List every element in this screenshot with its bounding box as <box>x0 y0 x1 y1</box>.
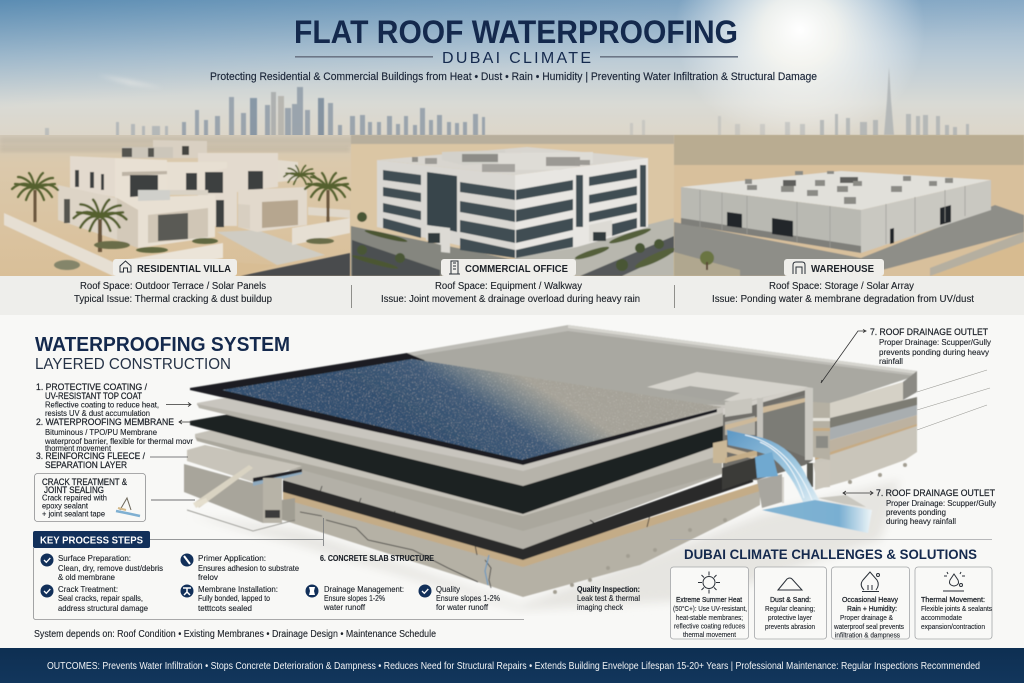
card: dust and sand: Dust & Sand: <box>770 595 811 604</box>
text: office details: Issue: Joint movement & drainage overload during heavy rain <box>381 294 640 305</box>
step: surface preparation: Clean, dry, remove dust/debris <box>58 564 163 573</box>
text: warehouse details: Roof Space: Storage / Solar Array <box>769 281 914 292</box>
callout: crack treatment: + joint sealant tape <box>42 510 106 518</box>
arrow: fleece to layer <box>150 456 188 458</box>
arrow: top drainage label <box>821 330 866 383</box>
text: villa details: Typical Issue: Thermal cracking & dust buildup <box>74 294 272 305</box>
layer: top coat sheet <box>190 353 722 465</box>
panel: commercial office illustration <box>351 135 677 276</box>
rubble along base <box>553 463 907 594</box>
step: drainage management: Drainage Management: <box>324 585 404 594</box>
card: dust and sand: prevents abrasion <box>765 622 815 631</box>
arrow: coating to layer <box>166 402 191 406</box>
layer: light protective base <box>197 395 725 486</box>
villa garage block <box>238 187 307 232</box>
rooftop plant <box>412 150 593 172</box>
label tab: residential villa <box>113 259 237 276</box>
pavement and roads <box>351 226 515 276</box>
step: membrane installation <box>180 584 278 613</box>
arrow: membrane to layer <box>179 420 192 424</box>
step: crack treatment <box>40 584 149 613</box>
palm behind <box>284 166 316 184</box>
step: crack treatment: address structural damage <box>58 604 149 613</box>
label tab: residential villa: RESIDENTIAL VILLA <box>137 264 231 275</box>
icon: sun <box>698 572 720 594</box>
label tab: warehouse <box>784 259 884 276</box>
icon: house with drops <box>861 572 880 592</box>
card: extreme heat: (50°C+): Use UV-resistant, <box>673 604 747 613</box>
arrow: bottom drainage label <box>843 491 873 495</box>
text: villa details <box>74 281 272 305</box>
step: drainage management: water runoff <box>323 603 366 612</box>
card: thermal movement: Flexible joints & sealants <box>921 604 992 613</box>
label: drainage outlet bottom <box>876 488 996 526</box>
text: quality inspection: imaging check <box>577 603 624 612</box>
leader lines from strata <box>917 370 990 430</box>
label: drainage outlet top: rainfall <box>879 357 903 366</box>
cracks <box>300 486 650 588</box>
card: dust and sand <box>754 567 826 639</box>
planting <box>364 228 408 244</box>
card: rain and humidity: waterproof seal prevents <box>833 622 904 631</box>
card: dust and sand: Regular cleaning; <box>765 604 815 613</box>
metal frame at drain <box>713 387 830 508</box>
building volumes <box>378 147 648 175</box>
title: FLAT ROOF WATERPROOFING <box>294 14 738 50</box>
label: drainage outlet top: prevents ponding during heavy <box>879 348 989 357</box>
layer list: resists UV & dust accumulation <box>45 409 150 418</box>
card: extreme heat: reflective coating reduces <box>674 622 745 630</box>
icon: house <box>120 261 131 272</box>
layer: reinforcing fleece <box>195 428 722 531</box>
text: villa details: Roof Space: Outdoor Terrace / Solar Panels <box>80 281 266 292</box>
key process steps tab: KEY PROCESS STEPS <box>40 536 143 546</box>
back roof slab <box>407 325 917 420</box>
label tab: warehouse: WAREHOUSE <box>811 264 874 275</box>
subtitle rule right <box>600 56 738 58</box>
icon: office tower <box>449 261 460 274</box>
villa upper volumes <box>153 140 207 158</box>
icon: sand pile <box>778 578 802 590</box>
heading: climate challenges: DUBAI CLIMATE CHALLENGES & SOLUTIONS <box>684 546 977 562</box>
heading: waterproofing system: LAYERED CONSTRUCTION <box>35 356 231 373</box>
footer bar <box>0 648 1024 683</box>
label: drainage outlet top: Proper Drainage: Scupper/Gully <box>879 338 991 347</box>
card: extreme heat <box>670 567 748 639</box>
callout: crack treatment: Crack repaired with <box>42 494 107 502</box>
villa lower left <box>58 185 117 240</box>
rule above climate section <box>670 538 992 541</box>
card: thermal movement <box>915 567 992 639</box>
card: extreme heat: heat-stable membranes; <box>676 613 743 622</box>
palms and planting <box>12 173 351 270</box>
concrete slab layer <box>283 452 722 549</box>
step: primer application: frelov <box>198 573 218 582</box>
subtitle rule left <box>295 56 433 58</box>
panel: key process steps box <box>34 548 524 620</box>
card: thermal movement: Thermal Movement: <box>921 595 985 604</box>
layer list: SEPARATION LAYER <box>45 460 127 470</box>
layer list: Reflective coating to reduce heat, <box>45 400 159 410</box>
label: drainage outlet top <box>870 327 991 366</box>
icon: droplet with rays <box>943 572 965 591</box>
text: office details <box>381 281 640 305</box>
card: dust and sand: protective layer <box>768 613 812 622</box>
step: primer application <box>180 554 300 582</box>
ground shadow <box>190 480 900 610</box>
callout: crack treatment: CRACK TREATMENT & <box>42 477 127 487</box>
panel: sky and skyline header <box>0 0 1024 145</box>
icon: warehouse door <box>793 262 805 274</box>
skyline: Burj Khalifa district <box>630 67 969 136</box>
text: office details: Roof Space: Equipment / Walkway <box>435 281 582 292</box>
panel: building info strip <box>0 276 1024 315</box>
panel: residential villa illustration <box>4 140 351 276</box>
step: membrane installation: Membrane Installation: <box>198 585 278 594</box>
label tab: commercial office <box>441 259 576 276</box>
illustration: layered roof cross-section <box>184 325 917 610</box>
card: thermal movement: expansion/contraction <box>921 622 985 631</box>
step: drainage management: Ensure slopes 1-2% <box>324 594 385 603</box>
text: warehouse details: Issue: Ponding water & membrane degradation from UV/dust <box>712 294 974 305</box>
key process steps tab <box>33 531 150 548</box>
villa front block <box>117 195 215 248</box>
card: rain and humidity: Occasional Heavy <box>842 595 898 604</box>
beige bedding stripe <box>283 483 760 567</box>
text: system dependency line: System depends on: Roof Condition • Existing Membranes • Drainage Design • Maintenance Schedule <box>34 629 436 640</box>
step: primer application: Primer Application: <box>198 554 266 563</box>
card: thermal movement: accommodate <box>921 613 962 622</box>
step: surface preparation: Surface Preparation: <box>58 554 131 563</box>
heading: waterproofing system: WATERPROOFING SYSTEM <box>35 334 290 356</box>
villa windows upper <box>75 170 263 197</box>
label: drainage outlet bottom: Proper Drainage: Scupper/Gully <box>886 499 996 508</box>
step: surface preparation <box>40 554 163 582</box>
heading: waterproofing system <box>35 334 290 373</box>
skyline: Dubai Marina <box>45 87 485 136</box>
road and driveway <box>240 253 350 276</box>
layer: black waterproofing membrane <box>190 414 725 514</box>
card: rain and humidity: Rain + Humidity: <box>847 604 897 613</box>
text: quality inspection: Leak test & thermal <box>577 594 640 603</box>
right side strata <box>815 371 917 490</box>
callout: crack treatment <box>34 474 146 522</box>
callout: crack treatment: JOINT SEALING <box>44 485 104 495</box>
step: quality: for water runoff <box>436 603 489 612</box>
villa walls back <box>308 207 350 218</box>
text: quality inspection <box>577 585 640 612</box>
step: drainage management <box>306 584 404 612</box>
step: membrane installation: Fully bonded, lapped to <box>198 594 270 603</box>
arrow: crack callout to block <box>151 499 195 501</box>
panel: warehouse illustration <box>674 135 1024 276</box>
layer list: thorment movement <box>45 444 112 453</box>
step: membrane installation: tetttcots sealed <box>198 604 252 613</box>
text: quality inspection: Quality Inspection: <box>577 585 640 594</box>
villa perimeter walls <box>4 213 113 276</box>
step: crack treatment: Seal cracks, repair spalls, <box>58 594 143 603</box>
step: quality: Ensure slopes 1-2% <box>436 594 500 603</box>
layer list: Bituminous / TPO/PU Membrane <box>45 428 158 437</box>
icon: sealant tool <box>116 498 140 516</box>
panel: desert band <box>0 135 1024 276</box>
label: drainage outlet bottom: 7. ROOF DRAINAGE OUTLET <box>876 488 995 498</box>
concrete base <box>283 490 760 597</box>
label tab: commercial office: COMMERCIAL OFFICE <box>465 264 568 275</box>
card: extreme heat: thermal movement <box>683 630 737 639</box>
layer list <box>36 382 193 470</box>
tagline: Protecting Residential & Commercial Buildings from Heat • Dust • Rain • Humidity | Preventing Water Infiltration & Structural Damage <box>210 71 817 83</box>
text: warehouse details <box>712 281 974 305</box>
step: surface preparation: & old membrane <box>58 573 116 582</box>
callout: crack treatment: epoxy sealant <box>42 502 89 510</box>
lower dark membrane <box>283 466 753 560</box>
layer list: 3. REINFORCING FLEECE / <box>36 451 145 461</box>
label: drainage outlet top: 7. ROOF DRAINAGE OUTLET <box>870 327 988 337</box>
label: concrete slab: 6. CONCRETE SLAB STRUCTURE <box>320 554 435 563</box>
connector lines <box>150 518 324 546</box>
step: crack treatment: Crack Treatment: <box>58 585 118 594</box>
step: quality: Quality <box>436 585 460 594</box>
label: drainage outlet bottom: prevents ponding <box>886 508 946 517</box>
card: rain and humidity: Proper drainage & <box>840 613 893 622</box>
step: primer application: Ensures adhesion to substrate <box>198 564 300 573</box>
layer list: waterproof barrier, flexible for thermal movr <box>44 437 193 446</box>
card: rain and humidity <box>832 567 910 640</box>
step: quality <box>418 584 500 612</box>
layer list: UV-RESISTANT TOP COAT <box>45 391 142 401</box>
left block with gutter <box>184 445 302 531</box>
subtitle: DUBAI CLIMATE <box>442 50 591 67</box>
layer list: 1. PROTECTIVE COATING / <box>36 382 147 392</box>
layer list: 2. WATERPROOFING MEMBRANE <box>36 417 174 427</box>
card: rain and humidity: infiltration & dampness <box>835 630 900 640</box>
water outfall <box>727 430 872 533</box>
label: drainage outlet bottom: during heavy rainfall <box>886 517 956 526</box>
card: extreme heat: Extreme Summer Heat <box>676 595 743 604</box>
